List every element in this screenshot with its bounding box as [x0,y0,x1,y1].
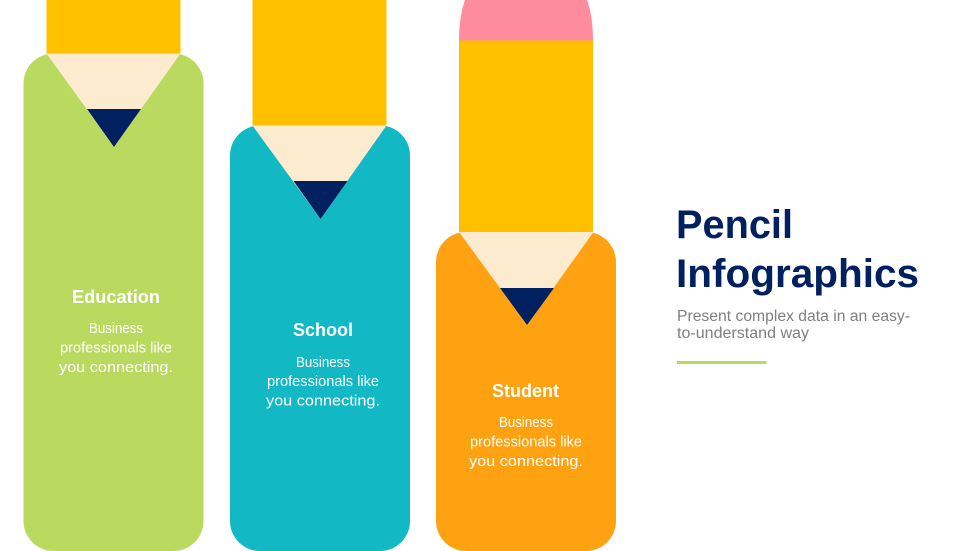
orange panel [436,232,616,551]
pencil eraser [459,0,593,40]
panel: School pencil [230,0,410,551]
green panel [24,54,204,551]
title: Pencil [676,203,793,247]
pencil lead [500,288,554,325]
pencil lead [294,181,348,219]
pencil wood tip [46,54,180,147]
heading: Student: Student [492,381,559,401]
panel: Student pencil [436,0,616,551]
pencil lead [87,109,141,147]
text: Education description: professionals like [60,340,172,356]
text: School description: professionals like [267,373,379,390]
title: Infographics [676,252,919,296]
panel: Education pencil [24,0,204,551]
text: Student description: you connecting. [469,453,583,470]
heading: Education: Education [72,287,160,307]
heading: School: School [293,320,353,340]
pencil body [459,40,593,232]
teal panel [230,126,410,551]
subtitle: to-understand way [677,325,809,342]
text: School description: you connecting. [266,392,380,410]
text: Student description: Business [499,414,553,431]
pencil wood tip [459,232,594,325]
text: Education description: you connecting. [59,359,173,376]
text: Education description: Business [89,320,143,337]
text: School description: Business [296,354,350,371]
accent line [677,361,766,364]
text: Student description: professionals like [470,434,582,450]
pencil body [252,0,386,126]
pencil body [46,0,180,54]
pencil wood tip [252,126,386,219]
subtitle: Present complex data in an easy- [677,308,910,325]
